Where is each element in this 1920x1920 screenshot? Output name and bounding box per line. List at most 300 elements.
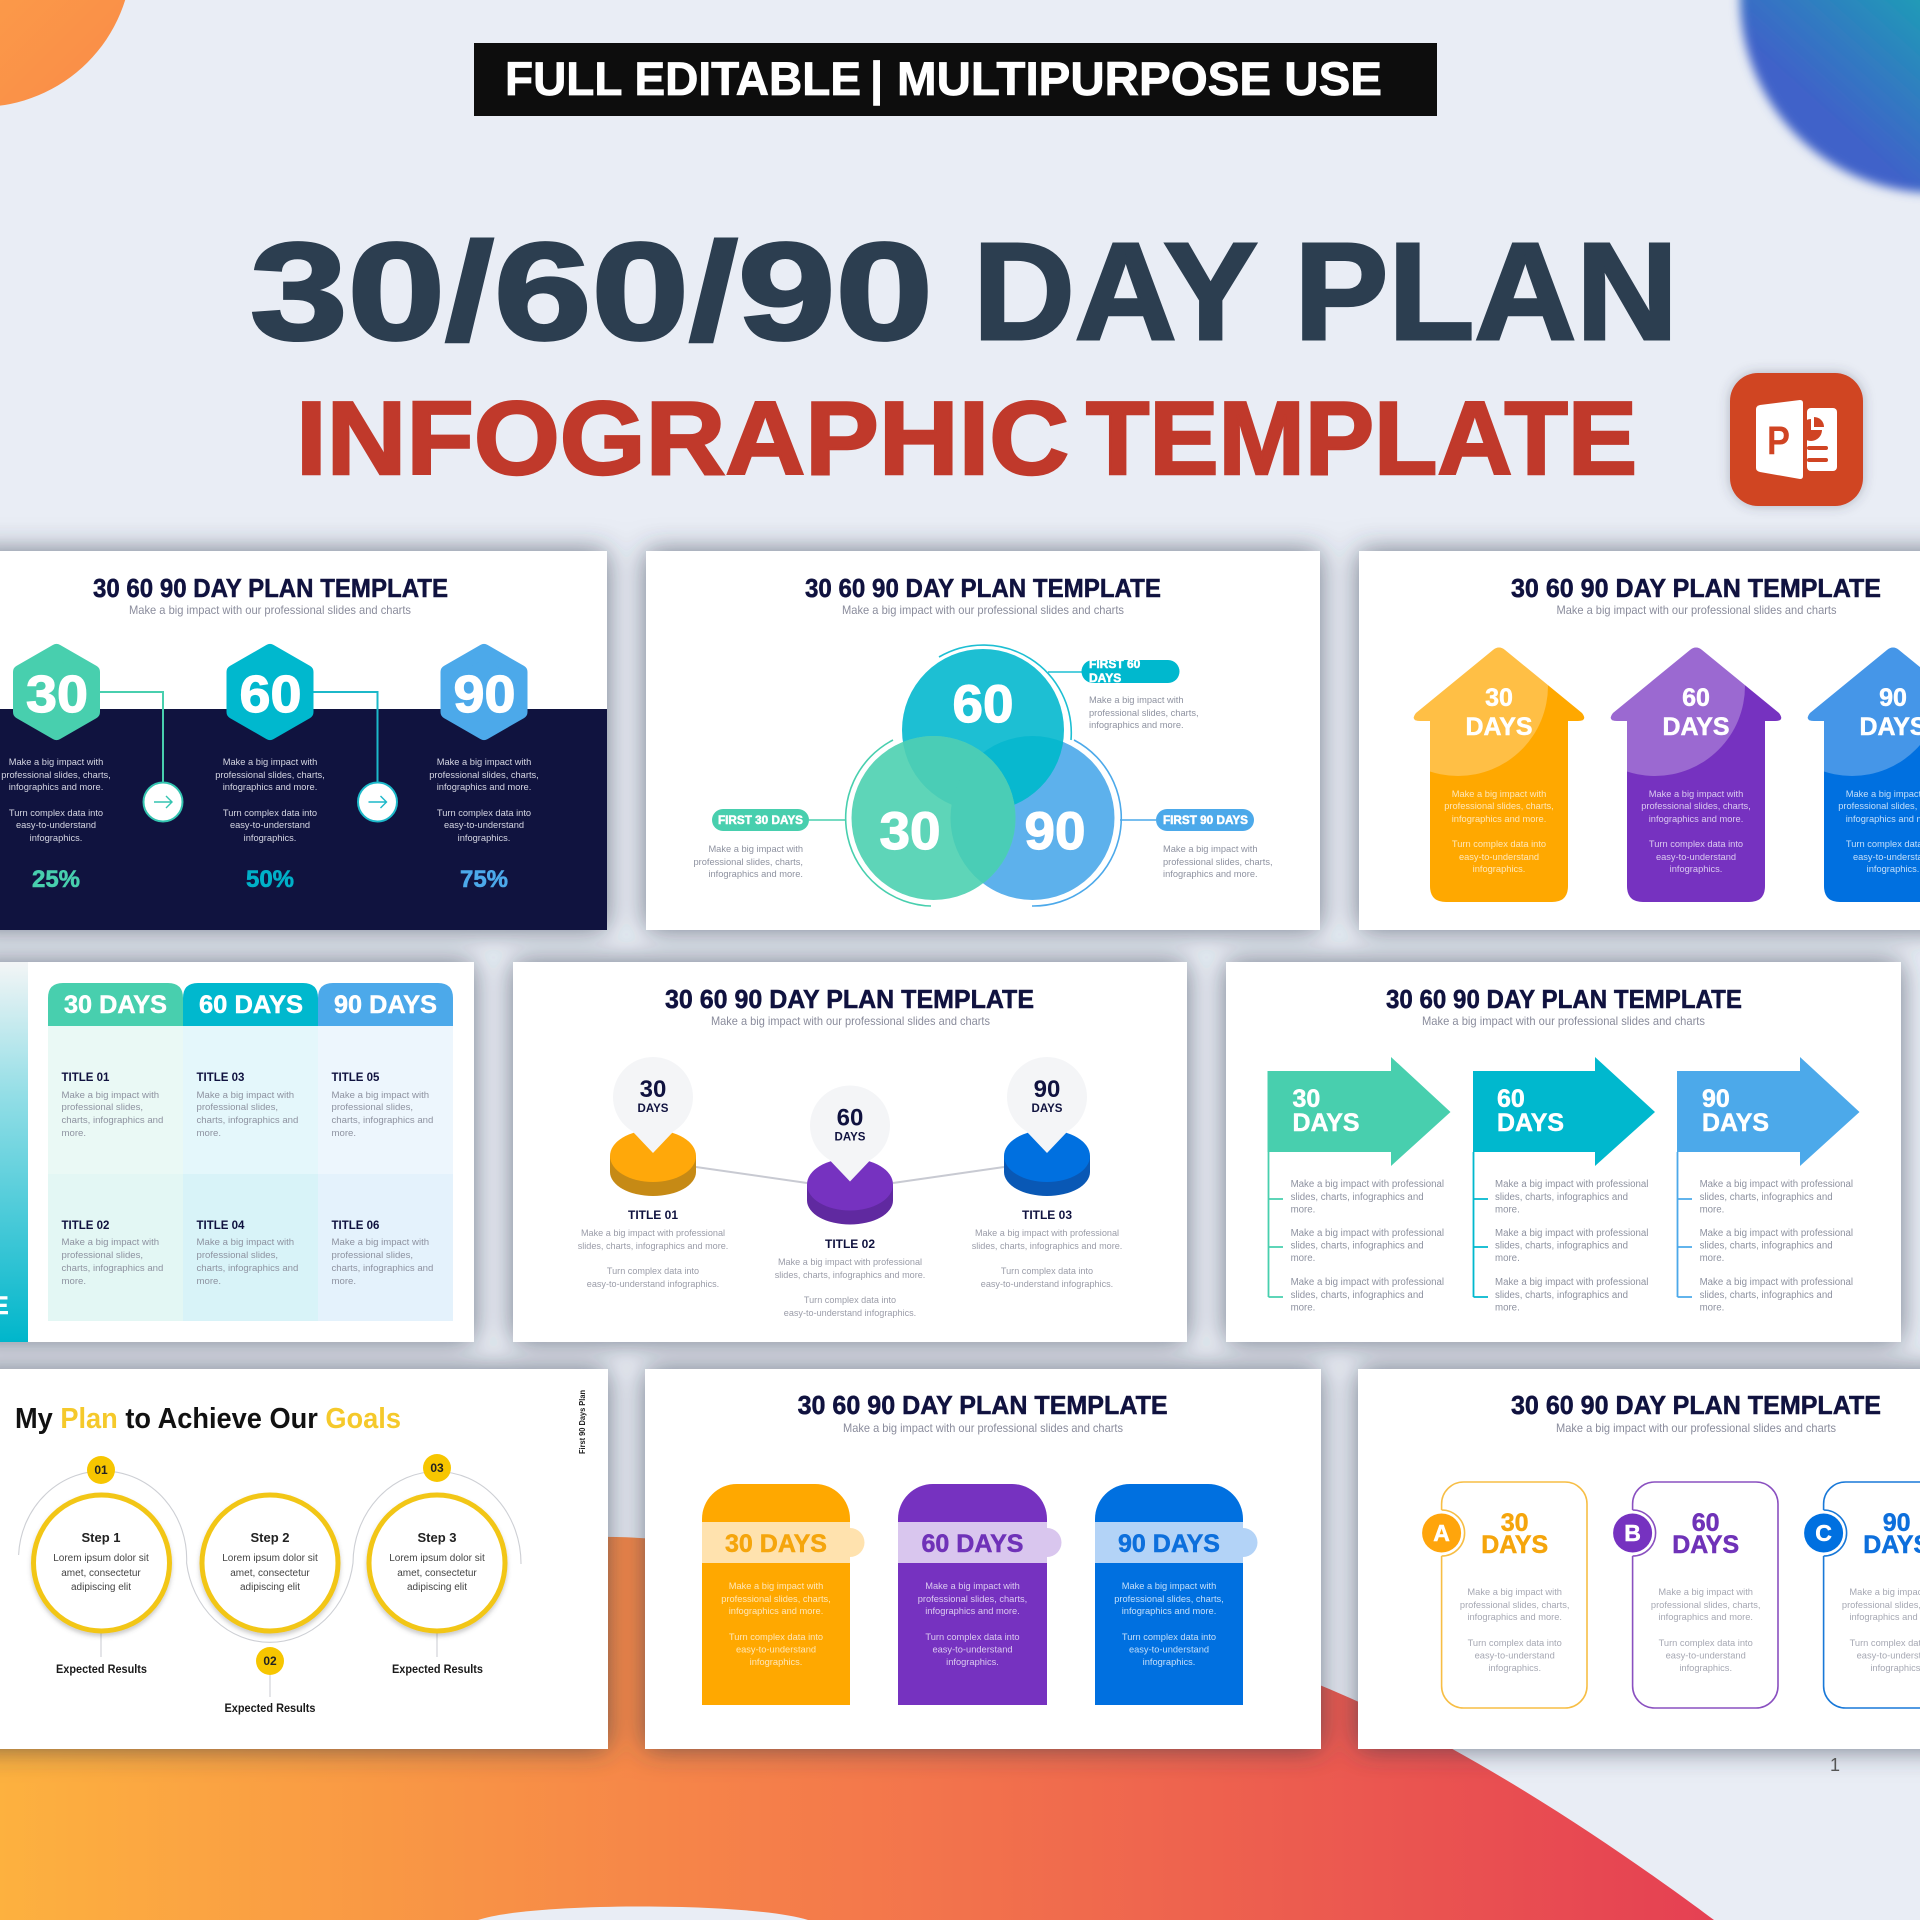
- header 90 days: [318, 983, 453, 1026]
- cell title 02: charts, infographics and: [62, 1263, 163, 1274]
- cell title 03: Make a big impact with: [196, 1090, 294, 1101]
- card 60 days: infographics.: [946, 1657, 999, 1667]
- hexagon 60: 60: [240, 666, 302, 724]
- arrow column 90 days: more.: [1700, 1205, 1724, 1216]
- arrow column 30 days: 30: [1292, 1085, 1320, 1113]
- outlined card B: 60: [1692, 1509, 1720, 1537]
- text: first 90 days: infographics and more.: [1163, 869, 1258, 879]
- house arrow 90 days: [1808, 648, 1920, 902]
- top banner: |: [870, 52, 883, 105]
- text block title 03: Turn complex data into: [1001, 1266, 1093, 1276]
- text block title 03: Make a big impact with professional: [975, 1228, 1119, 1238]
- cell title 02: professional slides,: [62, 1250, 143, 1261]
- house arrow 30 days: Make a big impact with: [1452, 789, 1546, 799]
- pin 30 days: DAYS: [638, 1103, 669, 1115]
- cell title 01: more.: [62, 1128, 86, 1139]
- column text 90: Turn complex data into: [437, 808, 531, 818]
- outlined card B: infographics.: [1679, 1663, 1732, 1673]
- column text 30: [1, 757, 111, 843]
- card 30 days: Turn complex data into: [729, 1632, 823, 1642]
- expected results labels: Expected Results: [56, 1662, 147, 1676]
- cell title 06: more.: [332, 1276, 356, 1287]
- text block title 03: easy-to-understand infographics.: [981, 1279, 1113, 1289]
- percentages: 75%: [460, 866, 508, 893]
- subtitle: infographic template: TEMPLATE: [1086, 381, 1637, 497]
- column text 30: infographics.: [30, 833, 82, 843]
- pin 60 days: [807, 1086, 893, 1224]
- column text 60: Turn complex data into: [223, 808, 317, 818]
- cell title 05: TITLE 05: [332, 1072, 380, 1084]
- step 1: amet, consectetur: [61, 1568, 141, 1579]
- venn outer arcs: [846, 645, 1121, 906]
- card 30 days: professional slides, charts,: [721, 1594, 831, 1604]
- wave line and stems: [19, 1471, 521, 1697]
- slide 3 title: 30 60 90 DAY PLAN TEMPLATE: [1511, 573, 1881, 603]
- text block title 02: slides, charts, infographics and more.: [775, 1270, 925, 1280]
- outlined card C: [1804, 1482, 1920, 1708]
- outlined card A: 30: [1501, 1509, 1529, 1537]
- arrow column 30 days: more.: [1291, 1205, 1315, 1216]
- text block title 01: [578, 1208, 728, 1289]
- house arrow 60 days: 60: [1682, 684, 1710, 712]
- panel: slide 7 goals: [0, 1369, 608, 1749]
- card 60 days: [898, 1484, 1062, 1705]
- cell title 04: more.: [196, 1276, 221, 1287]
- text block title 01: easy-to-understand infographics.: [587, 1279, 719, 1289]
- expected results labels: Expected Results: [224, 1701, 316, 1715]
- column text 60: Make a big impact with: [223, 757, 317, 767]
- slide 8 subtitle: Make a big impact with our professional slides and charts: [843, 1421, 1123, 1435]
- venn numbers: [880, 675, 1086, 861]
- text block title 02: Turn complex data into: [804, 1295, 896, 1305]
- badge 03: [423, 1454, 451, 1482]
- outlined card B: infographics and more.: [1658, 1612, 1753, 1622]
- cell title 04: charts, infographics and: [196, 1263, 298, 1274]
- venn numbers: 90: [1024, 802, 1086, 861]
- arrow column 90 days: Make a big impact with professional: [1700, 1179, 1853, 1190]
- column text 90: infographics.: [458, 833, 510, 843]
- arrow column 90 days: Make a big impact with professional: [1700, 1277, 1853, 1288]
- text: first 30 days: Make a big impact with: [708, 844, 803, 854]
- house arrow 30 days: infographics.: [1473, 864, 1525, 874]
- outlined card B: Turn complex data into: [1659, 1638, 1753, 1648]
- slide 9 title: 30 60 90 DAY PLAN TEMPLATE: [1511, 1390, 1881, 1420]
- outlined card A: Turn complex data into: [1468, 1638, 1562, 1648]
- panel: slide 1 hexagon timeline: [0, 551, 607, 930]
- header 30 days: [48, 983, 183, 1026]
- house arrow 60 days: Make a big impact with: [1649, 789, 1743, 799]
- arrow column 60 days: slides, charts, infographics and: [1495, 1290, 1628, 1301]
- slide 3 subtitle: Make a big impact with our professional slides and charts: [1556, 603, 1836, 617]
- cell title 05: charts, infographics and: [332, 1115, 433, 1126]
- icon: PowerPoint logo: P: [1767, 419, 1790, 463]
- connector lines: [696, 1167, 1004, 1183]
- label: first 60 days: DAYS: [1089, 671, 1121, 685]
- cell title 03: [196, 1072, 298, 1139]
- percentages: [32, 866, 508, 893]
- slide 2 subtitle: Make a big impact with our professional slides and charts: [842, 603, 1124, 617]
- arrow column 90 days: [1677, 1057, 1860, 1314]
- outlined card B: easy-to-understand: [1666, 1651, 1746, 1661]
- pin 60 days: 60: [837, 1104, 863, 1132]
- card 90 days: infographics.: [1143, 1657, 1195, 1667]
- panel: slide 5 pucks and pins: [513, 962, 1187, 1342]
- column text 90: professional slides, charts,: [429, 770, 539, 780]
- arrow column 30 days: slides, charts, infographics and: [1291, 1241, 1424, 1252]
- venn numbers: 60: [952, 675, 1014, 734]
- text: first 30 days: professional slides, charts,: [693, 857, 803, 867]
- header 30 days: 30 DAYS: [64, 991, 167, 1019]
- step 2: Lorem ipsum dolor sit: [222, 1553, 318, 1564]
- text block title 03: slides, charts, infographics and more.: [972, 1241, 1122, 1251]
- house arrow 60 days: DAYS: [1662, 713, 1730, 741]
- arrow column 60 days: [1473, 1057, 1655, 1314]
- card 60 days: infographics and more.: [925, 1606, 1020, 1616]
- top banner: MULTIPURPOSE USE: [897, 52, 1382, 105]
- cell title 02: Make a big impact with: [62, 1237, 159, 1248]
- outlined card C: 90: [1883, 1509, 1911, 1537]
- column text 60: infographics.: [244, 833, 296, 843]
- panel: slide 2 venn diagram: [694, 578, 1272, 907]
- arrow column 90 days: slides, charts, infographics and: [1700, 1241, 1833, 1252]
- decorative bottom gradient blob: [0, 1537, 1714, 1920]
- label: first 30 days: [712, 809, 846, 831]
- label: first 90 days: FIRST 90 DAYS: [1163, 813, 1248, 827]
- cell title 04: TITLE 04: [196, 1220, 245, 1232]
- panel: slide 4 table: [0, 962, 474, 1342]
- outlined card A: infographics and more.: [1467, 1612, 1562, 1622]
- step 3: Lorem ipsum dolor sit: [389, 1553, 485, 1564]
- outlined card A: [1422, 1482, 1587, 1708]
- header 60 days: [183, 983, 318, 1026]
- cell title 06: [332, 1220, 433, 1287]
- cell title 06: TITLE 06: [332, 1220, 379, 1232]
- column text 30: professional slides, charts,: [1, 770, 111, 780]
- arrow column 60 days: more.: [1495, 1253, 1520, 1264]
- step 1: Lorem ipsum dolor sit: [53, 1553, 149, 1564]
- cell title 01: professional slides,: [62, 1102, 143, 1113]
- text: first 90 days: Make a big impact with: [1163, 844, 1258, 854]
- text: first 30 days: infographics and more.: [708, 869, 803, 879]
- step 2: adipiscing elit: [240, 1582, 300, 1593]
- step 2: [202, 1495, 338, 1631]
- text: first 60 days: professional slides, charts,: [1089, 708, 1199, 718]
- main title: 30/60/90: [250, 215, 933, 369]
- card 60 days: easy-to-understand: [932, 1645, 1013, 1655]
- house arrow 30 days: Turn complex data into: [1452, 839, 1546, 849]
- badge 02: [256, 1647, 284, 1675]
- cell title 04: [196, 1220, 298, 1287]
- card 90 days: easy-to-understand: [1129, 1645, 1209, 1655]
- main title: DAY PLAN: [973, 215, 1678, 369]
- navy band: [0, 709, 607, 930]
- vertical label: First 90 Days Plan: [577, 1390, 587, 1454]
- cell title 02: [62, 1220, 163, 1287]
- text block title 02: Make a big impact with professional: [778, 1257, 922, 1267]
- card 30 days: infographics and more.: [729, 1606, 823, 1616]
- outlined card A: easy-to-understand: [1475, 1651, 1555, 1661]
- hexagon 60: [234, 651, 306, 733]
- pin 90 days: DAYS: [1032, 1103, 1063, 1115]
- slide 9 subtitle: Make a big impact with our professional slides and charts: [1556, 1421, 1836, 1435]
- venn numbers: 30: [880, 802, 940, 861]
- panel: slide 9 outlined cards: [1358, 1369, 1920, 1749]
- subtitle: infographic template: INFOGRAPHIC: [296, 381, 1069, 497]
- main title: [250, 215, 1678, 369]
- label: first 60 days: FIRST 60: [1089, 657, 1141, 671]
- outlined card B: Make a big impact with: [1658, 1587, 1753, 1597]
- cell title 03: charts, infographics and: [196, 1115, 298, 1126]
- decorative corner circle: orange: [0, 0, 132, 107]
- expected results labels: [56, 1662, 483, 1715]
- arrow column 30 days: slides, charts, infographics and: [1291, 1290, 1424, 1301]
- header 90 days: 90 DAYS: [334, 991, 437, 1019]
- outlined card A: DAYS: [1481, 1531, 1548, 1559]
- column text 90: [429, 757, 539, 843]
- arrow column 90 days: more.: [1700, 1253, 1724, 1264]
- text block title 01: Make a big impact with professional: [581, 1228, 725, 1238]
- arrow column 60 days: DAYS: [1497, 1109, 1564, 1137]
- card 90 days: Turn complex data into: [1122, 1632, 1216, 1642]
- slide 5 title: 30 60 90 DAY PLAN TEMPLATE: [665, 984, 1034, 1014]
- pin 60 days: DAYS: [835, 1132, 866, 1144]
- expected results labels: Expected Results: [392, 1662, 483, 1676]
- badge 01: 01: [94, 1463, 108, 1477]
- step 3: Step 3: [417, 1530, 457, 1545]
- badge 02: 02: [263, 1654, 277, 1668]
- icon: PowerPoint logo: [1730, 373, 1863, 506]
- step 3: amet, consectetur: [397, 1568, 477, 1579]
- arrow column 60 days: Make a big impact with professional: [1495, 1277, 1648, 1288]
- text block title 01: Turn complex data into: [607, 1266, 699, 1276]
- slide 6 title: 30 60 90 DAY PLAN TEMPLATE: [1386, 984, 1742, 1014]
- card 30 days: 30 DAYS: [725, 1530, 827, 1558]
- arrow column 90 days: slides, charts, infographics and: [1700, 1192, 1833, 1203]
- column text 60: infographics and more.: [223, 782, 317, 792]
- arrow column 90 days: DAYS: [1702, 1109, 1769, 1137]
- outlined card B: B: [1624, 1520, 1641, 1546]
- cell title 06: charts, infographics and: [332, 1263, 433, 1274]
- text: first 60 days: [1089, 695, 1199, 730]
- cell title 05: more.: [332, 1128, 356, 1139]
- column text 90: easy-to-understand: [444, 820, 524, 830]
- subtitle: infographic template: [296, 381, 1637, 497]
- text: first 60 days: infographics and more.: [1089, 720, 1184, 730]
- text: first 90 days: [1163, 844, 1273, 879]
- step 1: [34, 1495, 170, 1631]
- text block title 03: TITLE 03: [1022, 1208, 1072, 1222]
- house arrow 60 days: Turn complex data into: [1649, 839, 1743, 849]
- step 3: adipiscing elit: [407, 1582, 467, 1593]
- panel: slide 3 house arrows: [1414, 578, 1920, 902]
- arrow column 90 days: 90: [1702, 1085, 1730, 1113]
- cell title 06: Make a big impact with: [332, 1237, 429, 1248]
- outlined card A: infographics.: [1488, 1663, 1541, 1673]
- label: first 60 days: [1048, 657, 1180, 685]
- percentages: 50%: [246, 866, 294, 893]
- card 60 days: professional slides, charts,: [918, 1594, 1027, 1604]
- hexagon 30: [20, 651, 93, 733]
- text: first 90 days: professional slides, charts,: [1163, 857, 1273, 867]
- column text 60: easy-to-understand: [230, 820, 310, 830]
- house arrow 60 days: professional slides, charts,: [1641, 801, 1751, 811]
- cell title 04: Make a big impact with: [196, 1237, 294, 1248]
- slide 1 subtitle: Make a big impact with our professional slides and charts: [129, 603, 411, 617]
- arrow column 60 days: slides, charts, infographics and: [1495, 1241, 1628, 1252]
- cell title 03: more.: [196, 1128, 221, 1139]
- text block title 01: TITLE 01: [628, 1208, 678, 1222]
- house arrow 60 days: infographics.: [1670, 864, 1722, 874]
- step 1: Step 1: [81, 1530, 121, 1545]
- step 1: adipiscing elit: [71, 1582, 131, 1593]
- cell title 03: professional slides,: [196, 1102, 278, 1113]
- arrow column 60 days: more.: [1495, 1205, 1520, 1216]
- house arrow 30 days: 30: [1485, 684, 1513, 712]
- cell title 01: [62, 1072, 163, 1139]
- cell title 01: charts, infographics and: [62, 1115, 163, 1126]
- top banner: FULL EDITABLE: [505, 52, 861, 105]
- outlined card A: A: [1433, 1520, 1450, 1546]
- step 3: [369, 1495, 505, 1631]
- arrow column 60 days: more.: [1495, 1302, 1520, 1314]
- column text 60: professional slides, charts,: [215, 770, 325, 780]
- text: first 30 days: [693, 844, 803, 879]
- cell title 05: [332, 1072, 433, 1139]
- card 60 days: Make a big impact with: [925, 1581, 1020, 1591]
- outlined card B: professional slides, charts,: [1651, 1600, 1760, 1610]
- table cells: [48, 1026, 453, 1321]
- slide 6 subtitle: Make a big impact with our professional slides and charts: [1422, 1014, 1705, 1028]
- outlined card B: [1613, 1482, 1778, 1708]
- text block title 02: [775, 1237, 925, 1318]
- arrow column 30 days: Make a big impact with professional: [1291, 1179, 1444, 1190]
- hexagon 90: 90: [454, 666, 516, 724]
- column text 90: infographics and more.: [437, 782, 531, 792]
- arrow column 60 days: Make a big impact with professional: [1495, 1228, 1648, 1239]
- outlined card B: DAYS: [1672, 1531, 1739, 1559]
- page number: 1: [1830, 1755, 1840, 1775]
- pin 90 days: [1004, 1057, 1090, 1196]
- pin 30 days: [610, 1057, 696, 1196]
- hexagon 90: [448, 651, 520, 733]
- house arrow 30 days: [1414, 648, 1584, 902]
- house arrow 60 days: easy-to-understand: [1656, 852, 1736, 862]
- panel: slide 6 arrows with lists: [1226, 962, 1901, 1342]
- slide 7 title: My Plan to Achieve Our Goals: [15, 1403, 401, 1435]
- text block title 01: slides, charts, infographics and more.: [578, 1241, 728, 1251]
- card 90 days: professional slides, charts,: [1114, 1594, 1224, 1604]
- arrow column 60 days: 60: [1497, 1085, 1525, 1113]
- outlined card C: C: [1815, 1520, 1832, 1546]
- house arrow 30 days: DAYS: [1466, 713, 1532, 741]
- column text 60: [215, 757, 325, 843]
- side gradient strip: [0, 962, 28, 1342]
- badge 03: 03: [430, 1461, 444, 1475]
- card 30 days: easy-to-understand: [736, 1645, 816, 1655]
- column text 30: easy-to-understand: [16, 820, 96, 830]
- cell title 01: TITLE 01: [62, 1072, 110, 1084]
- decorative corner circle: blue: [1740, 0, 1920, 193]
- arrow column 30 days: more.: [1291, 1302, 1315, 1314]
- panel: slide 8 cards: [645, 1369, 1321, 1749]
- venn circles: [852, 649, 1114, 900]
- text block title 02: TITLE 02: [825, 1237, 875, 1251]
- card 30 days: Make a big impact with: [729, 1581, 823, 1591]
- arrow column 60 days: Make a big impact with professional: [1495, 1179, 1648, 1190]
- slide 8 title: 30 60 90 DAY PLAN TEMPLATE: [798, 1390, 1168, 1420]
- slide 1 title: 30 60 90 DAY PLAN TEMPLATE: [93, 573, 448, 603]
- cell title 04: professional slides,: [196, 1250, 278, 1261]
- text block title 02: easy-to-understand infographics.: [784, 1308, 916, 1318]
- house arrow 90 days: infographics.: [1867, 864, 1919, 874]
- card 60 days: 60 DAYS: [922, 1530, 1024, 1558]
- card 90 days: infographics and more.: [1122, 1606, 1216, 1616]
- arrow column 30 days: DAYS: [1292, 1109, 1360, 1137]
- step 2: amet, consectetur: [230, 1568, 310, 1579]
- arrow column 30 days: slides, charts, infographics and: [1291, 1192, 1424, 1203]
- column text 90: Make a big impact with: [437, 757, 531, 767]
- badge 01: [87, 1456, 115, 1484]
- outlined card A: Make a big impact with: [1467, 1587, 1562, 1597]
- pin 90 days: 90: [1034, 1076, 1060, 1103]
- arrow column 30 days: [1268, 1057, 1450, 1314]
- arrow column 90 days: Make a big impact with professional: [1700, 1228, 1853, 1239]
- top banner: [474, 43, 1437, 116]
- card 30 days: [702, 1484, 864, 1705]
- label: first 90 days: [1120, 809, 1254, 831]
- house arrow 60 days: infographics and more.: [1649, 814, 1743, 824]
- header 60 days: 60 DAYS: [199, 991, 303, 1019]
- step 2: Step 2: [250, 1530, 290, 1545]
- arrow column 90 days: slides, charts, infographics and: [1700, 1290, 1833, 1301]
- card 30 days: infographics.: [750, 1657, 802, 1667]
- outlined card A: professional slides, charts,: [1460, 1600, 1569, 1610]
- pin 30 days: 30: [640, 1076, 666, 1103]
- column text 30: infographics and more.: [9, 782, 103, 792]
- slide 2 title: 30 60 90 DAY PLAN TEMPLATE: [805, 573, 1161, 603]
- card 90 days: [1095, 1484, 1258, 1705]
- text: first 60 days: Make a big impact with: [1089, 695, 1184, 705]
- card 60 days: Turn complex data into: [925, 1632, 1020, 1642]
- card 90 days: 90 DAYS: [1118, 1530, 1220, 1558]
- cell title 05: professional slides,: [332, 1102, 413, 1113]
- connectors and arrow nodes: [100, 692, 397, 822]
- arrow column 30 days: Make a big impact with professional: [1291, 1277, 1444, 1288]
- house arrow 30 days: infographics and more.: [1452, 814, 1546, 824]
- label: first 30 days: FIRST 30 DAYS: [718, 813, 803, 827]
- column text 30: Make a big impact with: [9, 757, 103, 767]
- slide 5 subtitle: Make a big impact with our professional slides and charts: [711, 1014, 990, 1028]
- cell title 05: Make a big impact with: [332, 1090, 429, 1101]
- cell title 06: professional slides,: [332, 1250, 413, 1261]
- cell title 03: TITLE 03: [196, 1072, 244, 1084]
- house arrow 30 days: professional slides, charts,: [1444, 801, 1554, 811]
- arrow column 60 days: slides, charts, infographics and: [1495, 1192, 1628, 1203]
- cell title 02: more.: [62, 1276, 86, 1287]
- text block title 03: [972, 1208, 1122, 1289]
- arrow column 30 days: Make a big impact with professional: [1291, 1228, 1444, 1239]
- house arrow 60 days: [1610, 648, 1782, 902]
- house arrow 90 days: 90: [1879, 684, 1907, 712]
- hexagon 30: 30: [26, 666, 88, 724]
- column text 30: Turn complex data into: [9, 808, 103, 818]
- cell title 02: TITLE 02: [62, 1220, 109, 1232]
- card 90 days: Make a big impact with: [1122, 1581, 1216, 1591]
- arrow column 90 days: more.: [1700, 1302, 1724, 1314]
- arrow column 30 days: more.: [1291, 1253, 1315, 1264]
- house arrow 30 days: easy-to-understand: [1459, 852, 1539, 862]
- percentages: 25%: [32, 866, 80, 893]
